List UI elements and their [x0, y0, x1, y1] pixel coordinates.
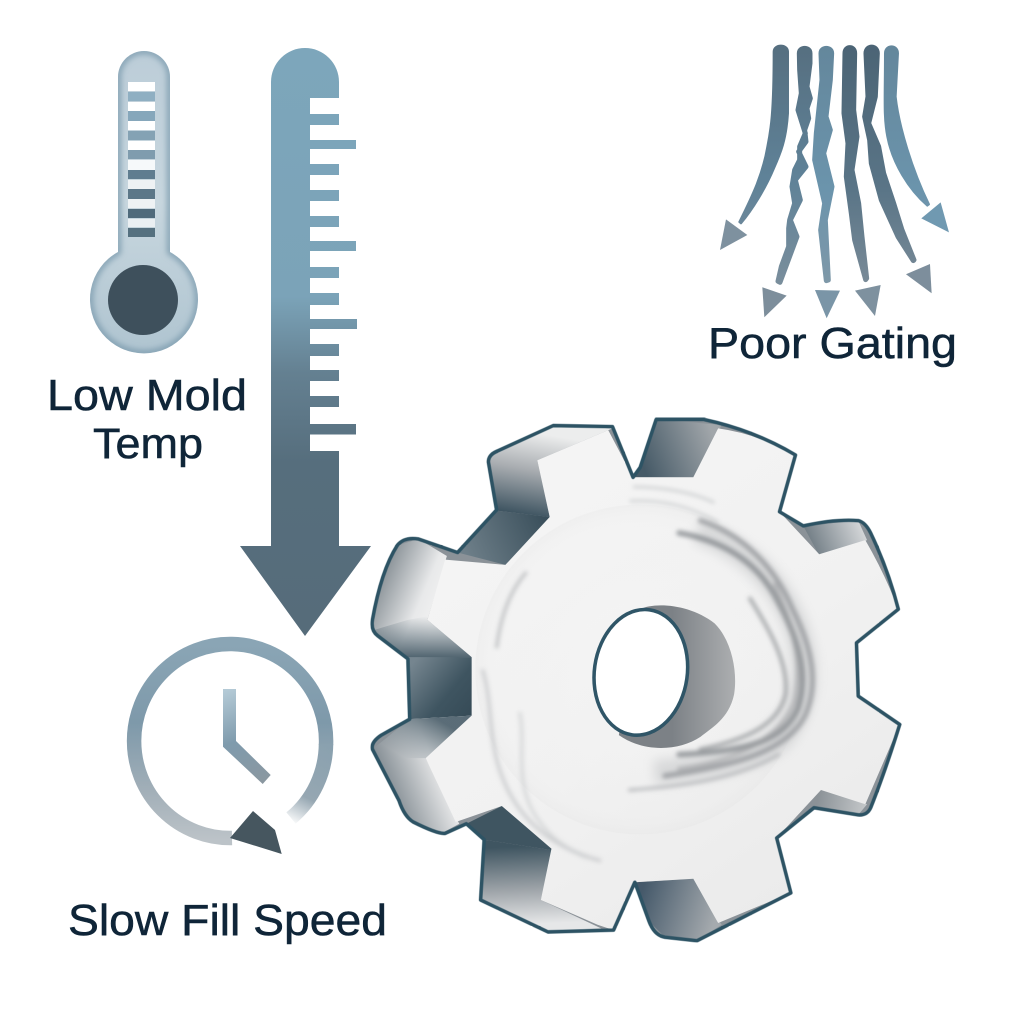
- thermometer body: [90, 51, 198, 353]
- flow stream 5: [865, 47, 914, 261]
- gear silhouette base: [372, 420, 900, 941]
- thermometer scale: [128, 82, 155, 237]
- label: Low Mold Temp: [47, 371, 247, 468]
- icon: clock: [134, 644, 326, 854]
- flow stream 3: [815, 48, 832, 281]
- flow line wrinkles, right side: [629, 521, 812, 790]
- gear outline: [372, 420, 900, 941]
- gear tooth side faces: [372, 420, 867, 941]
- flow stream 4: [844, 48, 867, 280]
- clock ring: [134, 644, 326, 838]
- label: Poor Gating: Poor Gating: [708, 319, 957, 368]
- label: Low Mold Temp: Low Mold: [47, 371, 247, 420]
- hole inner wall: [619, 605, 735, 748]
- arrow: falling scale thermometer: [240, 48, 371, 636]
- label: Low Mold Temp: Temp: [93, 420, 203, 468]
- icon: small thermometer: [90, 51, 198, 353]
- icon: turbulent flow streams: [720, 46, 949, 318]
- clock pointer: [230, 811, 282, 854]
- flow stream 2: [778, 48, 810, 282]
- flow line wrinkles, left side: [482, 572, 601, 861]
- flow stream 1: [739, 46, 788, 223]
- broad soft defect band: [654, 531, 804, 772]
- arrowheads: [720, 202, 949, 318]
- flow stream 6: [885, 46, 929, 206]
- label: Slow Fill Speed: Slow Fill Speed: [68, 896, 387, 945]
- thermometer bulb: [108, 265, 178, 335]
- gear dome: [475, 505, 805, 834]
- flow line wrinkles, top: [629, 487, 718, 522]
- gear with flow line defects: [372, 420, 900, 941]
- gear front face: [426, 428, 900, 930]
- clock ring fading end: [291, 744, 326, 818]
- clock hands: [223, 689, 271, 784]
- gear hole: [586, 603, 696, 741]
